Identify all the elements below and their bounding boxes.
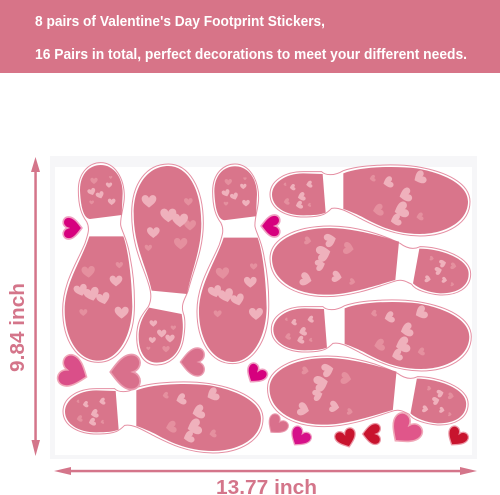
label: 9.84 inch: 9.84 inch [7,283,29,372]
header banner: 8 pairs of Valentine's Day Footprint Stickers, [35,14,325,30]
footprint sticker 3 [197,164,269,364]
heart: rose under middle foot [180,348,204,376]
footprint sticker 2 [132,164,203,365]
heart: red three [443,424,470,451]
heart: rose lower left [110,354,140,390]
footprint sticker 8 [63,382,263,453]
heart: magenta left [63,217,82,239]
footprint sticker 5 [270,226,471,297]
footprint sticker 7 [267,356,468,427]
arrow: height dimension [31,157,40,456]
heart: rose small [263,412,290,439]
heart stickers [55,215,470,451]
heart: red two [363,424,380,444]
footprint sticker 4 [270,165,470,236]
footprint sticker 6 [271,300,471,371]
heart: red one [333,426,359,450]
heart: large pink [383,410,425,451]
sticker sheet [50,156,477,459]
header banner: 16 Pairs in total, perfect decorations to meet your different needs. [35,47,467,63]
heart: magenta under third foot [242,361,269,388]
heart: dark pink lower left [55,353,92,392]
arrow: width dimension [54,467,477,475]
header banner [0,0,500,73]
heart: magenta small [286,424,313,451]
heart: magenta right of third foot [261,215,280,237]
footprint sticker 1 [63,163,134,362]
